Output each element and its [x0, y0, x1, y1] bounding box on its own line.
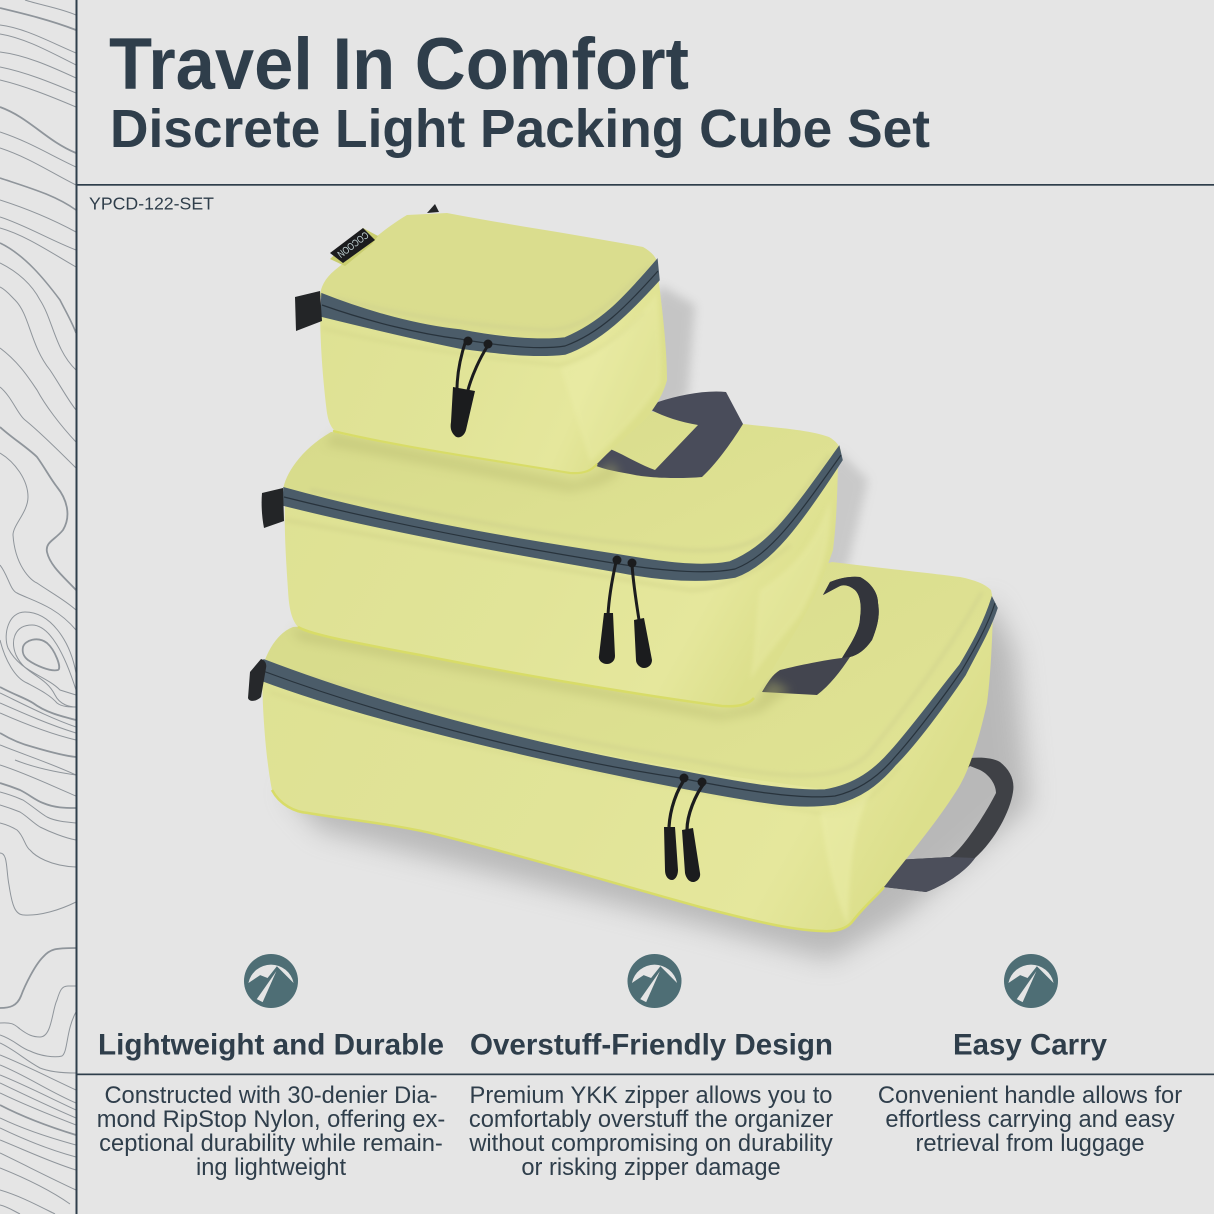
large cube side handle — [884, 758, 1013, 892]
medium cube body seam and folds — [285, 520, 790, 590]
medium cube top seam — [310, 455, 830, 550]
large cube top seam — [300, 592, 982, 775]
product code: YPCD-122-SET — [89, 194, 214, 214]
large cube body seam — [270, 692, 900, 815]
small cube left tab — [295, 291, 322, 331]
title: Travel In Comfort — [109, 24, 689, 105]
medium cube — [262, 392, 842, 720]
product illustration: packing cube set — [248, 204, 1030, 960]
text block: overstuff-friendly design: or risking zipper damage — [521, 1155, 781, 1181]
text block: easy carry: retrieval from luggage — [915, 1131, 1145, 1157]
large cube vertical fold highlight — [820, 790, 872, 925]
subtitle: Discrete Light Packing Cube Set — [110, 99, 930, 159]
text block: easy carry: effortless carrying and easy — [885, 1107, 1175, 1133]
medium cube lit edge — [750, 500, 830, 680]
small cube zipper pulls — [451, 336, 492, 437]
small cube top — [320, 213, 658, 340]
small cube brand label: COCOON — [335, 229, 370, 259]
icon: mountain right — [1004, 954, 1058, 1008]
text block: lightweight and durable — [97, 1083, 445, 1181]
icon: mountain left — [244, 954, 298, 1008]
medium cube top — [283, 410, 841, 567]
text block: overstuff-friendly design — [468, 1083, 833, 1181]
medium cube zipper — [283, 447, 842, 580]
medium cube zipper pulls — [599, 556, 652, 668]
small cube body — [320, 275, 667, 473]
large cube left tab — [248, 659, 266, 701]
small cube zipper — [321, 260, 659, 355]
floor shadow — [285, 600, 1030, 960]
text block: lightweight and durable: ceptional durability while remain- — [99, 1131, 443, 1157]
small cube corner highlight — [560, 293, 661, 462]
small cube — [295, 204, 667, 492]
large cube top — [263, 562, 993, 793]
text block: lightweight and durable: mond RipStop Nylon, offering ex- — [97, 1107, 445, 1133]
topographic pattern — [0, 0, 76, 1214]
medium cube left tab — [262, 488, 284, 528]
medium cube shadow on large cube — [290, 628, 790, 720]
heading: easy carry: Easy Carry — [953, 1028, 1107, 1062]
medium cube handle — [594, 392, 743, 478]
icon: mountain center — [628, 954, 682, 1008]
medium cube body — [285, 465, 838, 706]
large cube zipper pulls — [664, 774, 706, 882]
text block: easy carry — [878, 1083, 1182, 1157]
mid and small cube shadows on background — [600, 285, 695, 440]
large cube body — [262, 610, 993, 931]
small cube top seam — [335, 266, 650, 330]
small cube shadow on medium cube — [325, 434, 620, 492]
text block: lightweight and durable: Constructed with 30-denier Dia- — [104, 1083, 438, 1109]
large cube zipper — [261, 598, 997, 806]
heading: overstuff-friendly design: Overstuff-Friendly Design — [470, 1028, 833, 1062]
small cube body seam — [322, 313, 645, 365]
text block: easy carry: Convenient handle allows for — [878, 1083, 1182, 1109]
text block: overstuff-friendly design: comfortably overstuff the organizer — [469, 1107, 833, 1133]
large cube — [248, 562, 1013, 931]
text block: overstuff-friendly design: without compromising on durability — [468, 1131, 833, 1157]
small cube back tab — [427, 204, 439, 213]
heading: lightweight and durable: Lightweight and Durable — [98, 1028, 444, 1062]
large cube rear handle — [762, 577, 879, 695]
text block: overstuff-friendly design: Premium YKK zipper allows you to — [470, 1083, 832, 1109]
text block: lightweight and durable: ing lightweight — [196, 1155, 346, 1181]
